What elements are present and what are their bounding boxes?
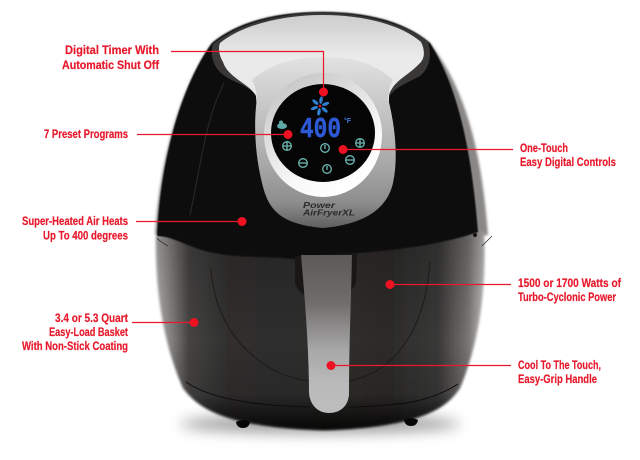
handle recess	[295, 253, 357, 296]
silver control panel	[252, 57, 396, 228]
basket rounded panel seam	[211, 262, 430, 381]
temperature readout: 400	[300, 113, 341, 146]
bezel ring	[264, 73, 382, 197]
brand logo: AirFryerXL	[302, 208, 355, 218]
basket bottom seam	[186, 382, 458, 407]
callout dots	[190, 88, 394, 370]
label: super-heated air: Super-Heated Air Heats	[22, 214, 128, 228]
brand logo	[302, 200, 355, 218]
label: preset programs: 7 Preset Programs	[44, 127, 128, 141]
label: digital timer: Automatic Shut Off	[62, 58, 160, 72]
degree unit: °F	[344, 117, 352, 125]
label: super-heated air	[22, 214, 128, 242]
handle	[301, 255, 352, 413]
label: basket: Easy-Load Basket	[49, 325, 128, 339]
brand logo: Power	[303, 200, 336, 210]
label: basket: With Non-Stick Coating	[22, 339, 128, 353]
label: digital controls: Easy Digital Controls	[520, 155, 616, 169]
lid button dot	[473, 233, 477, 237]
icon: preset food	[277, 120, 287, 129]
label: digital timer	[62, 43, 160, 72]
feet	[236, 418, 418, 428]
label: handle	[518, 358, 601, 386]
label: super-heated air: Up To 400 degrees	[43, 228, 128, 242]
air fryer product	[155, 12, 492, 433]
label: handle: Easy-Grip Handle	[518, 372, 597, 386]
label: basket: 3.4 or 5.3 Quart	[55, 311, 128, 325]
label: wattage	[518, 276, 622, 304]
touch buttons	[283, 139, 364, 173]
upper black housing	[157, 12, 478, 259]
label: basket	[22, 311, 128, 353]
shoulder reflections	[190, 83, 224, 215]
icon: fan	[310, 96, 330, 116]
floor shadow	[180, 415, 460, 433]
callout lines	[132, 52, 513, 366]
label: wattage: 1500 or 1700 Watts of	[518, 276, 622, 290]
label: digital controls: One-Touch	[520, 141, 568, 155]
black band seams	[157, 236, 492, 246]
label: digital timer: Digital Timer With	[65, 43, 159, 57]
lid rim	[212, 13, 430, 100]
display	[271, 84, 375, 182]
label: digital controls	[520, 141, 616, 169]
label: handle: Cool To The Touch,	[518, 358, 601, 372]
white lid	[219, 15, 424, 112]
basket	[156, 232, 484, 430]
soft body edge glow	[155, 12, 488, 237]
